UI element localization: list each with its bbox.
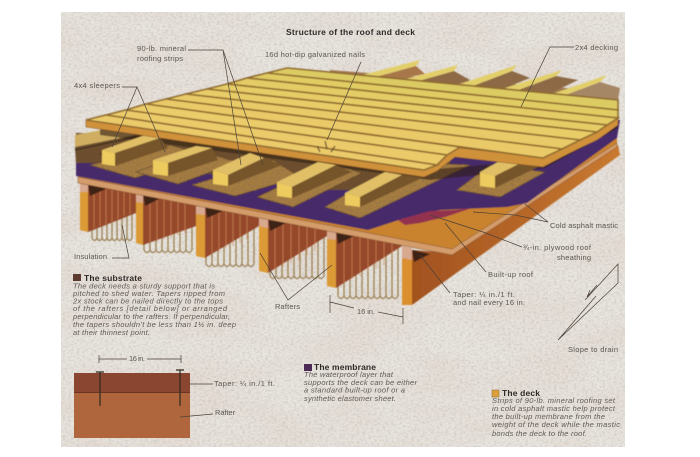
- text block: the substrate: perpendicular to the rafters. If perpendicular,: [72, 312, 230, 321]
- text block: the membrane: supports the deck can be either: [304, 378, 418, 387]
- label: cold asphalt mastic: [473, 204, 618, 230]
- text block: the deck: the built-up membrane from the: [492, 412, 605, 421]
- paper background: [61, 12, 625, 447]
- label: sleepers: [74, 81, 165, 152]
- icon: nails: [317, 141, 335, 152]
- text block: the membrane: [304, 362, 418, 403]
- label: built-up roof: Built-up roof: [488, 270, 534, 279]
- detail diagram: taper on rafter: Taper: ¼ in./1 ft.: [214, 379, 275, 388]
- text block: the membrane: The waterproof layer that: [304, 370, 394, 379]
- text block: the deck: Strips of 90-lb. mineral roofing set: [492, 396, 616, 405]
- label: plywood sheathing: ¾-in. plywood roof: [523, 243, 592, 252]
- label: galvanized nails: 16d hot-dip galvanized nails: [265, 50, 365, 59]
- label: sleepers: 4x4 sleepers: [74, 81, 120, 90]
- text block: the deck: in cold asphalt mastic help protect: [492, 404, 616, 413]
- dimension: 16 in.: [330, 295, 403, 324]
- text block: the substrate: the tapers shouldn’t be less than 1½ in. deep: [73, 320, 236, 329]
- text block: the substrate: The deck needs a sturdy support that is: [73, 282, 215, 290]
- deck shadow: [100, 125, 618, 180]
- text block: the deck: [492, 388, 620, 438]
- rear sleepers behind deck: [330, 60, 620, 104]
- icon: slope to drain: Slope to drain: [568, 345, 618, 354]
- text block: the membrane: a standard built-up roof or a: [304, 386, 405, 394]
- detail diagram: taper on rafter: 16 in.: [129, 354, 145, 363]
- label: plywood sheathing: sheathing: [557, 253, 591, 262]
- label: built-up roof: [445, 223, 534, 279]
- text block: the substrate: The substrate: [84, 273, 142, 283]
- label: cold asphalt mastic: Cold asphalt mastic: [550, 221, 618, 230]
- detail diagram: taper on rafter: Rafter: [215, 408, 236, 417]
- tapered side rafter: [402, 145, 620, 305]
- icon: slope to drain: [558, 264, 618, 354]
- label: galvanized nails: [265, 50, 365, 140]
- detail diagram: taper on rafter: [74, 354, 275, 438]
- text block: the substrate: of the rafters [detail below] or arranged: [73, 304, 228, 313]
- rafters: [80, 180, 402, 288]
- text block: the substrate: [72, 273, 236, 337]
- text block: the deck: The deck: [502, 388, 540, 398]
- text block: the deck: bonds the deck to the roof.: [492, 429, 587, 438]
- plywood sheathing: [76, 130, 617, 255]
- label: rafters: [260, 253, 332, 311]
- label: roofing strips: roofing strips: [137, 54, 183, 63]
- 4x4 sleepers: [102, 134, 542, 207]
- icon: nails in detail: [96, 370, 184, 406]
- label: taper and nail: Taper: ¼ in./1 ft.: [453, 290, 515, 299]
- text block: the substrate: 2x stock can be nailed directly to the tops: [72, 296, 223, 306]
- text block: the membrane: synthetic elastomer sheet.: [304, 394, 396, 403]
- label: plywood sheathing: [430, 215, 592, 262]
- title: Structure of the roof and deck: [286, 27, 415, 37]
- label: decking: [521, 43, 618, 107]
- label: rafters: Rafters: [275, 302, 300, 311]
- 2x4 decking boards: [86, 68, 618, 177]
- label: taper and nail: [420, 255, 525, 307]
- text block: the substrate: pitched to shed water. Tapers ripped from: [72, 289, 225, 298]
- mastic field behind sleepers: [75, 128, 450, 190]
- label: decking: 2x4 decking: [575, 43, 618, 52]
- label: insulation: Insulation: [74, 252, 107, 261]
- text block: the membrane: The membrane: [314, 362, 376, 372]
- insulation: [92, 208, 398, 298]
- dimension: 16 in.: 16 in.: [357, 307, 375, 316]
- mastic patches: [90, 145, 545, 218]
- text block: the deck: weight of the deck while the mastic: [492, 420, 620, 429]
- label: roofing strips: 90-lb. mineral: [137, 44, 186, 53]
- label: taper and nail: and nail every 16 in.: [453, 298, 525, 307]
- label: insulation: [74, 225, 129, 261]
- text block: the substrate: at their thinnest point.: [73, 328, 150, 337]
- built-up membrane: [76, 110, 620, 230]
- roof and deck illustration: [75, 60, 620, 305]
- label: roofing strips: [137, 44, 263, 165]
